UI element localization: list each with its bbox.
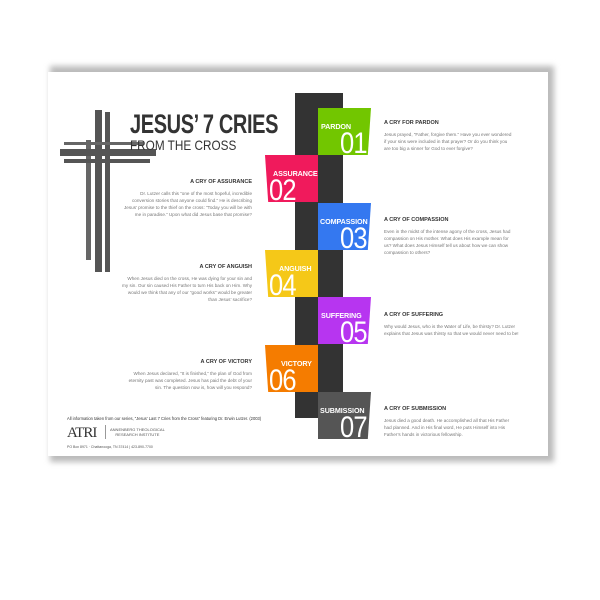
text: anguish: When Jesus died on the cross, He was dying for your sin and my sin. Our sin caused His Father to turn His back on Him. Why would we think that any of our “good works” would be greater than Jesus’ sacrifice? [122,276,252,302]
block: pardon: PARDON [321,122,351,131]
title [130,109,278,153]
block: victory: VICTORY [281,359,312,368]
block: suffering: SUFFERING [321,311,362,320]
text: pardon: A CRY FOR PARDON [384,120,439,126]
text: suffering: A CRY OF SUFFERING [384,312,443,318]
title: FROM THE CROSS [130,137,236,153]
icon: cross [60,110,156,272]
logo: ATRI: ATRI [67,425,96,441]
text: victory [128,359,252,390]
block: compassion: COMPASSION [320,217,368,226]
logo: ATRI: ANNENBERG THEOLOGICAL [110,427,165,432]
text: compassion: A CRY OF COMPASSION [384,217,448,223]
block: anguish [265,250,318,297]
logo: ATRI: RESEARCH INSTITUTE [115,432,159,437]
text: submission: A CRY OF SUBMISSION [384,406,446,412]
text: victory: A CRY OF VICTORY [201,359,252,365]
text: submission: Jesus died a good death. He accomplished all that His Father had planned. And in His final word, He puts Himself into His Father’s hands in victorious fellowship. [384,418,509,437]
footer: PO Box 8971 · Chattanooga, TN 37414 | 423-890-7700 [67,445,153,449]
text: suffering: Why would Jesus, who is the Water of Life, be thirsty? Dr. Lutzer explains that Jesus was thirsty so that we would never need to be! [384,324,519,336]
block: submission [318,392,371,439]
dark column [295,93,343,418]
text: compassion: Even in the midst of the intense agony of the cross, Jesus had compassion on His mother. What does His example mean for us? What does Jesus Himself tell us about how we can show compassion to others? [384,229,510,255]
text: assurance: A CRY OF ASSURANCE [190,179,252,185]
block: victory [265,345,318,392]
text: pardon: Jesus prayed, “Father, forgive them.” Have you ever wondered if your sins were included in that prayer? Or do you think you are too big a sinner for God to ever forgive? [384,132,511,151]
footer [67,416,261,449]
text: assurance: Dr. Lutzer calls this “one of the most hopeful, incredible conversion stories that anyone could find.” He is describing Jesus’ promise to the thief on the cross: “Today you will be with me in paradise.” Upon what did Jesus base that promise? [124,191,252,217]
text: submission [384,406,510,437]
text: suffering [384,312,519,336]
block: submission: SUBMISSION [320,406,365,415]
text: assurance [124,179,252,217]
title: JESUS’ 7 CRIES [130,109,278,139]
text: victory: When Jesus declared, “It is finished,” the plan of God from eternity past was completed. Jesus has paid the debt of your sin. The question now is, how will you respond? [129,371,252,390]
logo: ATRI [67,425,165,441]
page [48,72,548,456]
block: assurance [265,155,318,202]
text: anguish [122,264,252,302]
block: anguish: ANGUISH [279,264,311,273]
text: pardon [384,120,512,151]
block: pardon [318,108,371,155]
block: assurance: ASSURANCE [273,169,318,178]
page shadow [50,66,554,462]
block: compassion [318,203,371,250]
text: compassion [384,217,510,255]
text: anguish: A CRY OF ANGUISH [200,264,252,270]
footer: All information taken from our series, “Jesus’ Last 7 Cries from the Cross” featuring Dr. Erwin Lutzer. (2003) [67,416,261,421]
block: suffering [318,297,371,344]
